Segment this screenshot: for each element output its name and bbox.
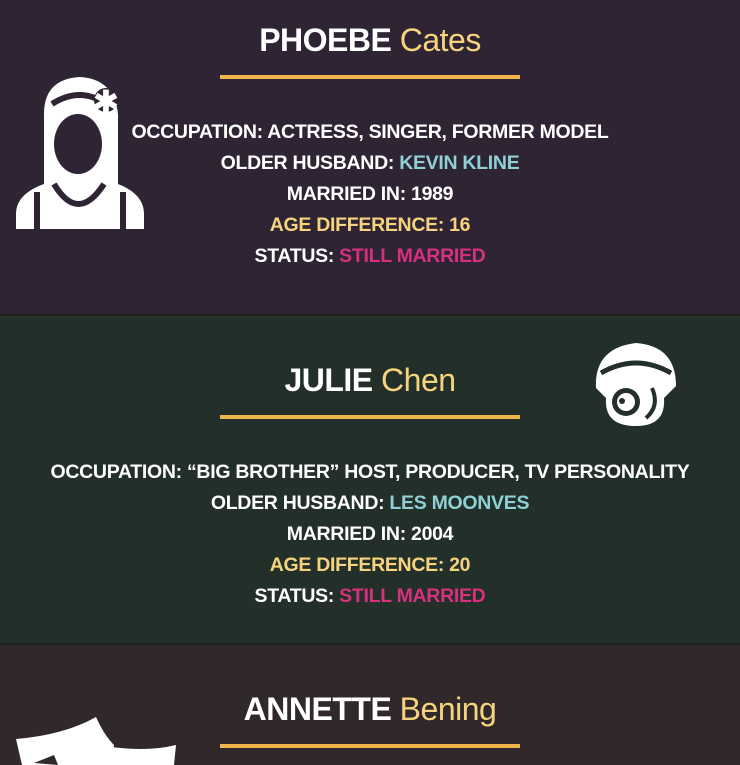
text block: details: MARRIED IN: 1989 (287, 183, 453, 205)
text block: details (131, 121, 608, 267)
title: JULIE Chen (284, 362, 456, 398)
title: PHOEBE Cates (259, 22, 481, 58)
text block: details: OCCUPATION: ACTRESS, SINGER, FORMER MODEL (131, 121, 608, 143)
icon: woman with flower (16, 77, 144, 229)
panel: Julie Chen (0, 316, 740, 643)
text block: details: STATUS: STILL MARRIED (255, 245, 485, 267)
panel: Phoebe Cates (0, 0, 740, 314)
text block: details: MARRIED IN: 2004 (287, 523, 453, 545)
text block: details: OCCUPATION: “BIG BROTHER” HOST, PRODUCER, TV PERSONALITY (50, 461, 690, 483)
icon: security camera (596, 343, 676, 426)
icon: woman with flower: ✱ (93, 86, 119, 119)
text block: details: OLDER HUSBAND: KEVIN KLINE (221, 152, 519, 174)
text block: details: AGE DIFFERENCE: 16 (270, 214, 470, 236)
icon: theater masks (16, 717, 176, 765)
text block: details: AGE DIFFERENCE: 20 (270, 554, 470, 576)
panel: Annette Bening (0, 645, 740, 765)
text block: details (50, 461, 690, 607)
text block: details: OLDER HUSBAND: LES MOONVES (211, 492, 529, 514)
text block: details: STATUS: STILL MARRIED (255, 585, 485, 607)
title: ANNETTE Bening (244, 691, 496, 727)
